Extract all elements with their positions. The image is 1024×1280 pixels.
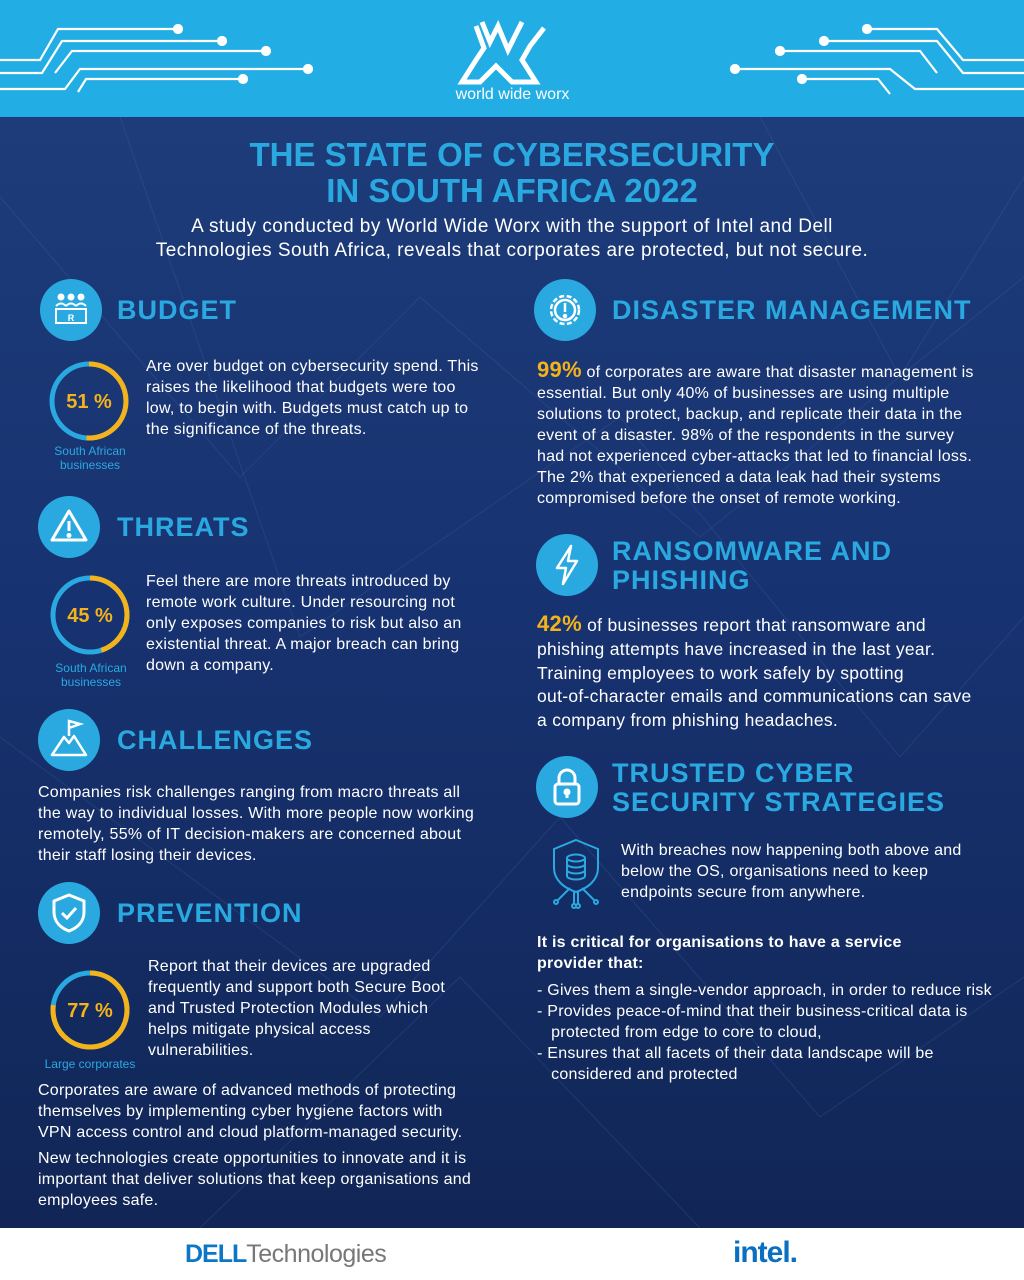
- subtitle: Technologies South Africa, reveals that corporates are protected, but not secure.: [156, 240, 868, 261]
- text: budget: [146, 358, 479, 438]
- donut: 77%: 77 %: [67, 1000, 113, 1022]
- text: prevention stat: Report that their devices are upgraded: [148, 958, 431, 975]
- text: disaster: [537, 357, 974, 507]
- text: disaster: compromised before the onset of remote working.: [537, 490, 901, 507]
- text: disaster: had not experienced cyber-attacks that led to financial loss.: [537, 448, 972, 465]
- text: service provider list: protected from edge to core to cloud,: [551, 1024, 822, 1041]
- text: trusted intro: endpoints secure from anywhere.: [621, 884, 865, 901]
- text: prevention paragraphs: [38, 1082, 471, 1209]
- text: disaster: The 2% that experienced a data leak had their systems: [537, 469, 941, 486]
- logo: intel: intel.: [733, 1236, 797, 1269]
- text: disaster: essential. But only 40% of businesses are using multiple: [537, 385, 949, 402]
- text: ransomware: phishing attempts have increased in the last year.: [537, 639, 935, 659]
- text: disaster: solutions to protect, backup, and replicate their data in the: [537, 406, 962, 423]
- heading: ransomware: [612, 536, 892, 595]
- text: threats: Feel there are more threats introduced by: [146, 573, 451, 590]
- text: prevention stat: frequently and support both Secure Boot: [148, 979, 445, 996]
- donut: 77%: [50, 970, 130, 1050]
- heading: prevention: PREVENTION: [117, 898, 303, 928]
- text: ransomware: Training employees to work safely by spotting: [537, 663, 904, 683]
- text: prevention paragraphs: VPN access control and cloud platform-managed security.: [38, 1124, 462, 1141]
- text: service provider list: [537, 934, 992, 1083]
- footer: [0, 1228, 1024, 1280]
- text: budget: Are over budget on cybersecurity spend. This: [146, 358, 479, 375]
- text: threats: existential threat. A major breach can bring: [146, 636, 459, 653]
- title: [250, 136, 774, 209]
- panel: trusted strategies: [536, 756, 992, 1083]
- text: trusted intro: below the OS, organisations need to keep: [621, 863, 928, 880]
- text: threats: down a company.: [146, 657, 274, 674]
- text: prevention paragraphs: themselves by implementing cyber hygiene factors with: [38, 1103, 443, 1120]
- heading: threats: THREATS: [117, 512, 250, 542]
- title: IN SOUTH AFRICA 2022: [326, 172, 698, 209]
- donut: 45%: [50, 576, 130, 654]
- donut: 51%: [50, 362, 128, 440]
- text: challenges: their staff losing their devices.: [38, 847, 257, 864]
- logo: world wide worx: [456, 20, 570, 103]
- caption: [55, 661, 127, 689]
- icon: padlock: [536, 756, 598, 818]
- panel: challenges: [38, 709, 474, 864]
- text: threats: remote work culture. Under resourcing not: [146, 594, 455, 611]
- caption: businesses: [60, 458, 120, 472]
- text: service provider list: - Gives them a single-vendor approach, in order to reduce risk: [537, 982, 992, 999]
- heading: trusted: [612, 758, 945, 817]
- donut: 45%: 45 %: [67, 605, 113, 627]
- caption: South African: [55, 661, 127, 675]
- icon: gear: [534, 279, 596, 341]
- icon: mountain flag: [38, 709, 100, 771]
- text: prevention paragraphs: employees safe.: [38, 1192, 158, 1209]
- caption: businesses: [61, 675, 121, 689]
- panel: prevention: [38, 882, 471, 1209]
- text: threats: [146, 573, 462, 674]
- text: budget: the significance of the threats.: [146, 421, 367, 438]
- text: trusted intro: With breaches now happening both above and: [621, 842, 962, 859]
- text: trusted intro: [621, 842, 962, 901]
- text: service provider list: provider that:: [537, 955, 644, 972]
- text: prevention stat: [148, 958, 445, 1059]
- icon: shield check: [38, 882, 100, 944]
- text: service provider list: - Ensures that all facets of their data landscape will be: [537, 1045, 934, 1062]
- text: challenges: the way to individual losses. With more people now working: [38, 805, 474, 822]
- panel: threats: [38, 496, 462, 689]
- text: budget: low, to begin with. Budgets must catch up to: [146, 400, 468, 417]
- logo: dell technologies: DELLTechnologies: [185, 1240, 386, 1268]
- text: service provider list: - Provides peace-of-mind that their business-critical data is: [537, 1003, 968, 1020]
- text: prevention paragraphs: important that deliver solutions that keep organisations and: [38, 1171, 471, 1188]
- text: challenges: Companies risk challenges ranging from macro threats all: [38, 784, 460, 801]
- donut: 51%: 51 %: [66, 391, 112, 413]
- text: challenges: [38, 784, 474, 864]
- text: budget: raises the likelihood that budgets were too: [146, 379, 456, 396]
- caption: Large corporates: [45, 1057, 135, 1071]
- text: ransomware: [537, 611, 972, 730]
- icon: shield database: [553, 838, 599, 909]
- panel: ransomware: [536, 534, 972, 730]
- heading: ransomware: RANSOMWARE AND: [612, 536, 892, 566]
- subtitle: [156, 216, 868, 261]
- circuit lines right: [730, 24, 1024, 95]
- text: disaster: event of a disaster. 98% of the respondents in the survey: [537, 427, 954, 444]
- text: prevention stat: vulnerabilities.: [148, 1042, 253, 1059]
- caption: South African: [54, 444, 126, 458]
- subtitle: A study conducted by World Wide Worx with the support of Intel and Dell: [191, 216, 833, 237]
- caption: [54, 444, 126, 472]
- text: ransomware: out-of-character emails and communications can save: [537, 686, 972, 706]
- text: service provider list: It is critical for organisations to have a service: [537, 934, 902, 951]
- panel: budget: [40, 279, 479, 472]
- heading: budget: BUDGET: [117, 295, 237, 325]
- text: threats: only exposes companies to risk but also an: [146, 615, 462, 632]
- icon: budget: R: [68, 313, 75, 323]
- icon: warning: [38, 496, 100, 558]
- icon: budget: [40, 279, 102, 341]
- text: ransomware: 42% of businesses report that ransomware and: [537, 611, 926, 636]
- heading: challenges: CHALLENGES: [117, 725, 313, 755]
- circuit lines left: [0, 24, 314, 93]
- heading: ransomware: PHISHING: [612, 565, 751, 595]
- heading: trusted: SECURITY STRATEGIES: [612, 787, 945, 817]
- panel: disaster management: [534, 279, 974, 507]
- header band: [0, 0, 1024, 117]
- title: THE STATE OF CYBERSECURITY: [250, 136, 774, 173]
- heading: disaster management: DISASTER MANAGEMENT: [612, 295, 972, 325]
- text: prevention paragraphs: New technologies create opportunities to innovate and it is: [38, 1150, 466, 1167]
- icon: lightning: [536, 534, 598, 596]
- text: service provider list: considered and protected: [551, 1066, 738, 1083]
- heading: trusted: TRUSTED CYBER: [612, 758, 855, 788]
- text: prevention stat: and Trusted Protection Modules which: [148, 1000, 428, 1017]
- text: prevention paragraphs: Corporates are aware of advanced methods of protecting: [38, 1082, 456, 1099]
- text: challenges: remotely, 55% of IT decision-makers are concerned about: [38, 826, 461, 843]
- text: prevention stat: helps mitigate physical access: [148, 1021, 371, 1038]
- logo: world wide worx: world wide worx: [456, 86, 569, 103]
- text: disaster: 99% of corporates are aware that disaster management is: [537, 357, 974, 382]
- text: ransomware: a company from phishing headaches.: [537, 710, 838, 730]
